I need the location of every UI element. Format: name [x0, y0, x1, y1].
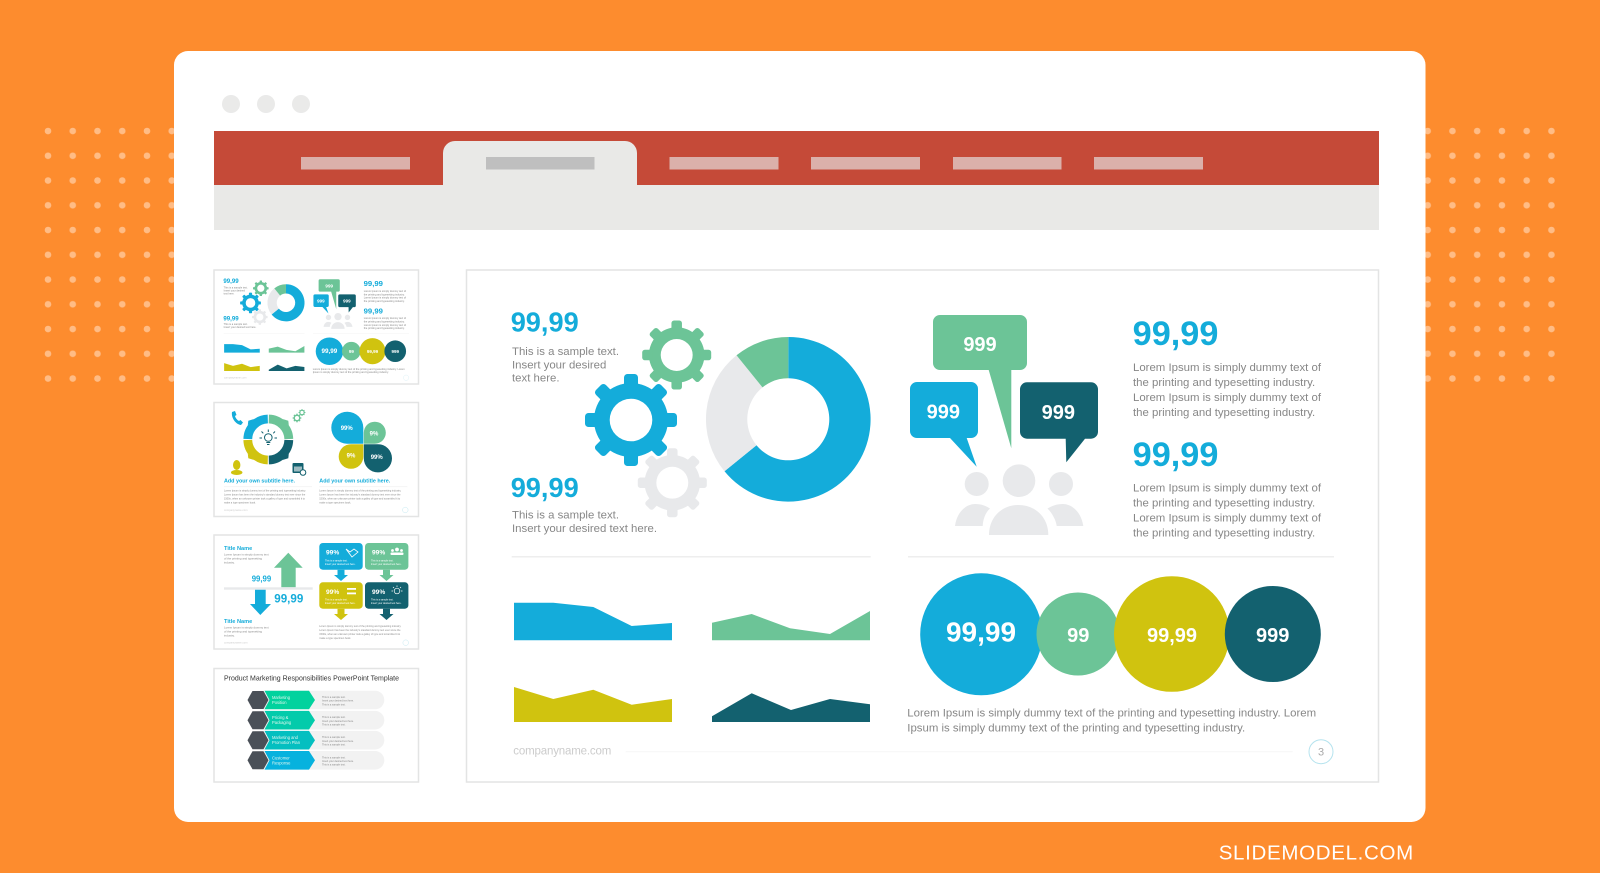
thumbnail 1: infographic slide: Ipsum is simply dummy text of the printing and typesetting industry. [313, 370, 389, 374]
arrow up [274, 553, 303, 587]
stat: right top [1133, 315, 1322, 419]
card: teal: This is a sample text. [371, 598, 394, 602]
thumbnail 1: infographic slide: Insert your desired text here. [224, 325, 257, 329]
thumbnail 1: infographic slide: This is a sample text. [224, 322, 248, 326]
card: yellow: This is a sample text. [325, 598, 348, 602]
body text: make a type specimen book. [319, 502, 351, 504]
thumbnail 3: arrows and cards slide: companyname.com [224, 642, 248, 644]
card: yellow [319, 582, 363, 620]
row 1: This is a sample text. [322, 696, 346, 699]
title and text, bottom: Lorem Ipsum is simply dummy text [224, 626, 269, 630]
icon: gears [293, 409, 305, 422]
card: green [365, 543, 408, 581]
body text: 1500s, when an unknown printer took a galley of type and scrambled it to [319, 633, 401, 636]
body text: Lorem Ipsum has been the industry's standard dummy text ever since the [319, 494, 401, 496]
ribbon menu bar [214, 131, 1379, 230]
stat: right bottom: 99,99 [1133, 436, 1218, 474]
row 2: Packaging [272, 720, 292, 725]
page number [1309, 740, 1333, 764]
stat: right bottom: the printing and typesetting industry. [1133, 498, 1315, 510]
speech bubble: green: 999 [963, 334, 997, 356]
stat: lower left number and text: 99,99 [511, 472, 579, 503]
thumbnail 3: arrows and cards slide: 99,99 [252, 575, 272, 584]
thumbnail 3: arrows and cards slide [214, 535, 418, 649]
stat: right bottom: Lorem Ipsum is simply dummy text of [1133, 483, 1322, 495]
bubble circles: 99 [1067, 625, 1089, 647]
stat: top left number and text [511, 307, 619, 385]
title and text, top: Title Name [224, 546, 252, 552]
body text: Lorem Ipsum is simply dummy text of the printing and typesetting industry. [319, 490, 402, 492]
row 1 [248, 691, 384, 709]
row 2: This is a sample text. [322, 724, 346, 727]
arrow down [250, 590, 271, 615]
panel: main slide [466, 270, 1378, 782]
row 4: This is a sample text. [322, 764, 346, 767]
stat: right bottom: Lorem Ipsum is simply dummy text of [1133, 513, 1322, 525]
bubble circles: 99,99 [946, 617, 1016, 648]
stat: right top: Lorem Ipsum is simply dummy text of [1133, 362, 1322, 374]
thumbnail 1: infographic slide: This is a sample text. [224, 285, 248, 289]
card: green: Insert your desired text here. [371, 563, 402, 566]
subtitles: Add your own subtitle here. [224, 478, 295, 484]
page number: 3 [1318, 746, 1324, 758]
card: blue: 99% [326, 549, 339, 556]
thumbnail 1: infographic slide: 999 [343, 299, 351, 304]
stat: lower left number and text [511, 472, 657, 535]
donut with bulb [248, 419, 289, 460]
clover chart: 99% [371, 455, 383, 461]
row 4: Insert your desired text here. [322, 760, 354, 763]
row 3: Promotion Plan [272, 740, 301, 745]
thumbnail 2: donut and clover slide: companyname.com [224, 509, 248, 512]
subtitles: Add your own subtitle here. [319, 478, 391, 484]
clover chart [331, 412, 392, 472]
row 4: Customer [272, 755, 290, 760]
card: yellow: Insert your desired text here. [325, 602, 356, 605]
title and text, top: industry. [224, 560, 235, 564]
card: yellow: 99% [326, 589, 339, 596]
clover chart: 9% [370, 432, 379, 438]
row 3: This is a sample text. [322, 736, 346, 739]
title: Product Marketing Responsibilities PowerPoint Template [224, 674, 399, 683]
thumbnail 1: infographic slide: the printing and typesetting industry. [364, 299, 405, 303]
thumbnail 1: infographic slide [214, 270, 418, 384]
stat: top left number and text: text here. [512, 373, 560, 385]
thumbnail 1: infographic slide: the printing and typesetting industry. [364, 292, 405, 296]
body text: 1500s, when an unknown printer took a galley of type and scrambled it to [224, 498, 305, 500]
card: blue [319, 543, 363, 581]
thumbnail 3: arrows and cards slide: 99,99 [274, 593, 304, 606]
thumbnail 1: infographic slide: 99 [349, 349, 354, 354]
stat: right top: 99,99 [1133, 315, 1218, 353]
bubble circles: 999 [1256, 625, 1289, 647]
thumbnail 4: product marketing responsibilities slide [214, 668, 418, 782]
row 2 [248, 711, 384, 730]
thumbnail 1: infographic slide: 99,99 [223, 315, 239, 322]
icon: gears [585, 320, 711, 517]
body text [224, 490, 402, 504]
row 1: Position [272, 700, 287, 705]
row 3: Marketing and [272, 735, 299, 740]
thumbnail 1: infographic slide: Lorem Ipsum is simply dummy text of [364, 316, 406, 320]
stat: lower left number and text: This is a sample text. [512, 509, 619, 521]
area chart: yellow [514, 687, 672, 722]
row 3: Insert your desired text here. [322, 740, 354, 743]
stat: right top: the printing and typesetting industry. [1133, 407, 1315, 419]
brand label: SLIDEMODEL.COM [1219, 841, 1413, 864]
caption text: Lorem Ipsum is simply dummy text of the printing and typesetting industry. Lorem [907, 708, 1316, 720]
row 3: This is a sample text. [322, 744, 346, 747]
thumbnail 1: infographic slide: text here. [224, 291, 235, 295]
stat: right bottom: the printing and typesetting industry. [1133, 528, 1315, 540]
thumbnail 1: infographic slide: 99,99 [364, 306, 383, 315]
icon: people [955, 464, 1083, 535]
thumbnail 1: infographic slide: Lorem Ipsum is simply dummy text of the printing and typesetting industry. Lorem [313, 367, 405, 371]
stat: right bottom [1133, 436, 1322, 540]
title and text, top [224, 546, 269, 564]
title and text, bottom [224, 619, 269, 638]
card: blue: Insert your desired text here. [325, 563, 356, 566]
title and text, top: Lorem Ipsum is simply dummy text [224, 552, 269, 556]
thumbnail 2: donut and clover slide [214, 402, 418, 516]
subtitles [224, 478, 391, 484]
card: teal: 99% [372, 589, 385, 596]
footer company name: companyname.com [513, 745, 611, 757]
thumbnail 1: infographic slide: Lorem Ipsum is simply dummy text of [364, 296, 406, 300]
title and text, bottom: industry. [224, 634, 235, 638]
caption text: Ipsum is simply dummy text of the printing and typesetting industry. [907, 723, 1245, 735]
area chart: blue [514, 603, 672, 640]
row 3 [248, 731, 384, 750]
thumbnail 1: infographic slide: 999 [391, 349, 399, 354]
row 2: Insert your desired text here. [322, 720, 354, 723]
row 4: Response [272, 760, 291, 765]
area chart: teal [712, 693, 870, 722]
stat: top left number and text: This is a sample text. [512, 346, 619, 358]
window control dots [222, 95, 310, 113]
row 1: Marketing [272, 695, 291, 700]
body text: Lorem Ipsum has been the industry's standard dummy text ever since the [319, 629, 401, 632]
icon: person [231, 460, 242, 475]
area chart: green [712, 611, 870, 640]
card: blue: This is a sample text. [325, 560, 348, 562]
body text: Lorem Ipsum is simply dummy text of the printing and typesetting industry. [319, 625, 402, 628]
row 1: Insert your desired text here. [322, 700, 354, 703]
card: teal [365, 582, 408, 620]
thumbnail 1: infographic slide: 999 [317, 299, 325, 304]
icon: calendar [292, 463, 306, 475]
stat: top left number and text: 99,99 [511, 307, 579, 338]
thumbnail 1: infographic slide: the printing and typesetting industry. [364, 319, 405, 323]
bubble circles [920, 573, 1321, 695]
row 2: Pricing & [272, 715, 289, 720]
title and text, bottom: Title Name [224, 619, 252, 625]
row 2: This is a sample text. [322, 716, 346, 719]
stat: lower left number and text: Insert your desired text here. [512, 523, 657, 535]
clover chart: 9% [347, 454, 356, 460]
speech bubble: blue [910, 382, 978, 467]
donut chart [706, 337, 871, 502]
speech bubble: teal: 999 [1042, 402, 1075, 424]
card: teal: Insert your desired text here. [371, 602, 402, 605]
body text: Lorem Ipsum is simply dummy text of the printing and typesetting industry. [224, 490, 306, 492]
thumbnail 1: infographic slide: Insert your desired [224, 288, 245, 292]
body text: make a type specimen book. [224, 502, 256, 504]
speech bubble: green [933, 315, 1027, 448]
thumbnail 1: infographic slide: 999 [325, 283, 333, 288]
speech bubble: blue: 999 [927, 401, 960, 423]
thumbnail 1: infographic slide: companyname.com [224, 376, 246, 379]
stat: right top: the printing and typesetting industry. [1133, 377, 1315, 389]
thumbnail 1: infographic slide: Lorem Ipsum is simply dummy text of [364, 289, 406, 293]
bubble circles: 99,99 [1147, 625, 1197, 647]
thumbnail 1: infographic slide: 99,99 [322, 348, 338, 355]
thumbnail 1: infographic slide: Lorem Ipsum is simply dummy text of [364, 323, 406, 327]
body text: Lorem Ipsum has been the industry's standard dummy text ever since the [224, 494, 306, 496]
stat: top left number and text: Insert your desired [512, 360, 606, 372]
thumbnail 1: infographic slide: 99,99 [364, 279, 383, 288]
row 1: This is a sample text. [322, 703, 346, 706]
clover chart: 99% [341, 426, 353, 432]
thumbnail 1: infographic slide: 99,99 [367, 349, 379, 354]
speech bubble: teal [1020, 382, 1098, 462]
row 4 [248, 751, 384, 770]
card: green: 99% [372, 549, 385, 556]
row 4: This is a sample text. [322, 756, 346, 759]
title and text, top: of the printing and typesetting [224, 556, 262, 560]
thumbnail 1: infographic slide: 99,99 [223, 278, 239, 285]
title and text, bottom: of the printing and typesetting [224, 630, 262, 634]
body text: 1500s, when an unknown printer took a galley of type and scrambled it to [319, 498, 401, 500]
body text: make a type specimen book. [319, 637, 351, 640]
stat: right top: Lorem Ipsum is simply dummy text of [1133, 392, 1322, 404]
panel: browser window card [174, 51, 1426, 822]
thumbnail 1: infographic slide: the printing and typesetting industry. [364, 326, 405, 330]
card: green: This is a sample text. [371, 560, 394, 562]
icon: phone [232, 411, 243, 425]
